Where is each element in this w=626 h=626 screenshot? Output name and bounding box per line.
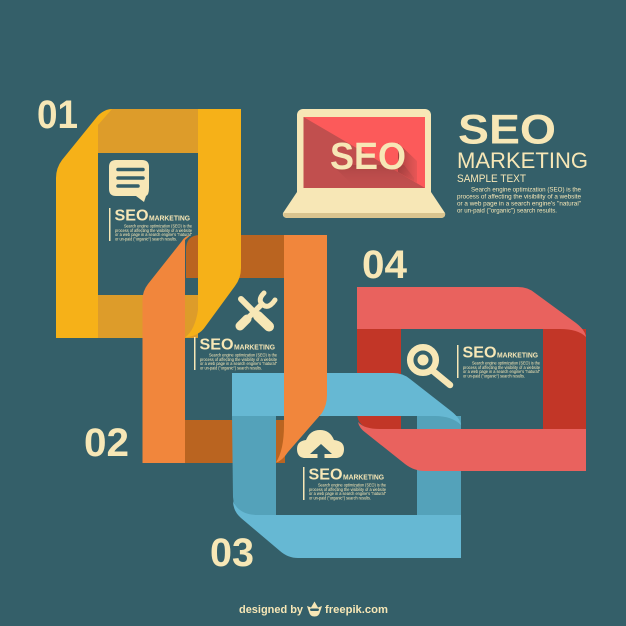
text block: 04: or un-paid ("organic") search results. [463, 374, 525, 378]
text block: 01: or un-paid ("organic") search results. [115, 236, 177, 242]
text block: 03: Search engine optimization (SEO) is the [318, 482, 386, 488]
number 04: 04 [362, 243, 408, 287]
icon: cloud upload [297, 430, 344, 458]
footer credit [239, 602, 388, 616]
text block: 01: process of affecting the visibility of a website [115, 228, 192, 233]
text block: 01: or a web page in a search engine's "natural" [115, 232, 192, 237]
text block: 04: SEO [462, 344, 496, 362]
title: SAMPLE TEXT [457, 173, 526, 185]
title: SEO [458, 106, 556, 152]
icon: wrench and screwdriver [240, 293, 275, 326]
panel: orange frame back bands [185, 235, 285, 463]
panel: red top band [357, 287, 586, 337]
number 01: 01 [37, 93, 78, 137]
text block: 01: MARKETING [149, 216, 191, 222]
icon: laptop: SEO [330, 136, 406, 178]
text block: intro [457, 186, 582, 214]
text block: 03 [303, 466, 386, 500]
panel: blue frame back strips [232, 416, 461, 515]
text block: 04: or a web page in a search engine's "natural" [463, 369, 540, 374]
text block: 04: Search engine optimization (SEO) is the [472, 360, 540, 366]
panel: orange left strip [142, 236, 190, 463]
text block: 02 [194, 336, 277, 370]
text block: intro: process of affecting the visibility of a website [457, 194, 582, 200]
text block: 03: SEO [308, 466, 342, 484]
panel: blue bottom band [233, 501, 461, 558]
panel: blue top band [232, 373, 461, 425]
footer credit: designed by [239, 604, 304, 616]
text block: 01: SEO [114, 208, 148, 224]
text block: intro: or un-paid ("organic") search results. [457, 208, 557, 214]
text block: 03: or un-paid ("organic") search results. [309, 496, 371, 500]
text block: 02: or a web page in a search engine's "natural" [200, 361, 277, 366]
text block: 03: MARKETING [343, 474, 385, 482]
icon: chat bubble [109, 160, 149, 202]
text block: intro: Search engine optimization (SEO) is the [471, 186, 582, 194]
number 02: 02 [84, 421, 129, 465]
text block: 02: Search engine optimization (SEO) is the [209, 352, 277, 358]
icon: magnifier [410, 347, 450, 385]
text block: 02: SEO [200, 336, 234, 354]
panel: yellow frame back bands [98, 109, 198, 338]
panel: yellow front strips [56, 109, 241, 338]
text block: 04: MARKETING [497, 352, 539, 360]
number 03: 03 [210, 531, 254, 575]
text block: intro: or a web page in a search engine's "natural" [457, 200, 581, 208]
text block: 04: process of affecting the visibility of a website [463, 365, 540, 370]
text block: 03: process of affecting the visibility of a website [309, 487, 386, 492]
icon: laptop [283, 109, 445, 218]
text block: 01 [109, 208, 192, 242]
text block: 04 [457, 344, 540, 378]
text block: 03: or a web page in a search engine's "natural" [309, 491, 386, 496]
panel: red bottom band [358, 422, 586, 471]
title: MARKETING [457, 148, 588, 173]
text block: 02: process of affecting the visibility of a website [200, 357, 277, 362]
panel: red frame back strips [357, 329, 586, 429]
text block: 01: Search engine optimization (SEO) is the [124, 224, 192, 228]
title [457, 106, 588, 185]
text block: 02: MARKETING [234, 344, 276, 352]
footer credit: freepik.com [325, 604, 388, 616]
panel: orange right strip [276, 235, 327, 462]
text block: 02: or un-paid ("organic") search results. [200, 366, 262, 370]
